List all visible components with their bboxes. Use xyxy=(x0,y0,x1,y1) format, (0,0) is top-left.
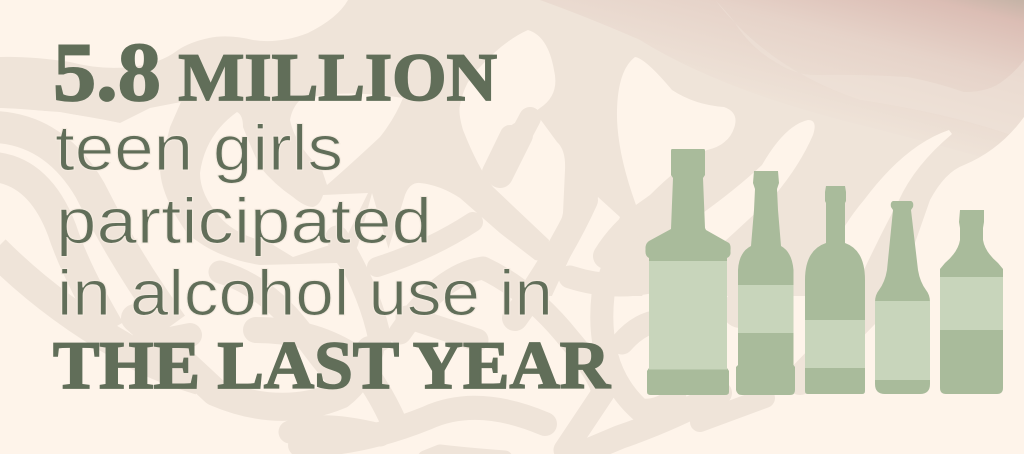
icon: wine bottle with tall neck xyxy=(736,171,795,395)
icon: beer bottle xyxy=(875,201,930,394)
icon: round shoulder wine bottle xyxy=(805,186,865,394)
text: in alcohol use in: in alcohol use in xyxy=(57,257,553,329)
bottle group xyxy=(645,149,1003,395)
icon: whiskey bottle xyxy=(645,149,731,395)
text: teen girls: teen girls xyxy=(55,112,343,184)
headline text xyxy=(53,26,611,403)
knot strands xyxy=(0,118,887,454)
text: participated: participated xyxy=(56,185,432,257)
headline: 5.8 million: 5.8 MILLION xyxy=(53,26,497,119)
headline: the last year: THE LAST YEAR xyxy=(53,327,611,403)
icon: short bottle xyxy=(940,210,1003,394)
